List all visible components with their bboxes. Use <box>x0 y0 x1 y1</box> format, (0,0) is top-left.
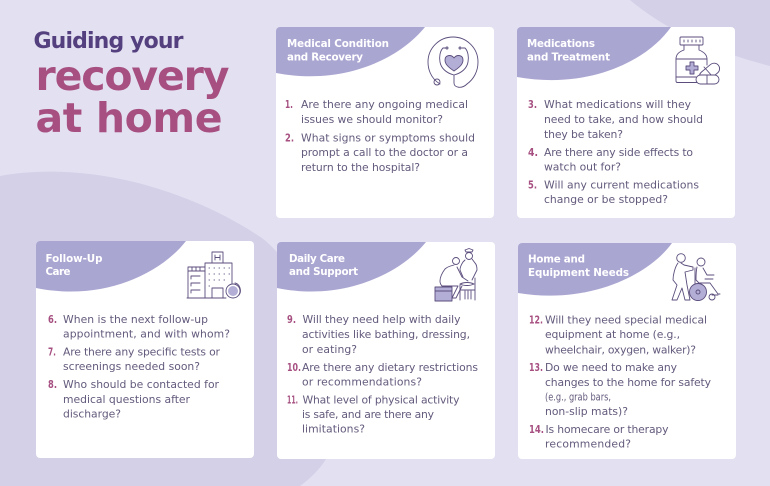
question list: return to the hospital? <box>301 161 420 174</box>
question list: 2. <box>285 132 294 144</box>
question list: What signs or symptoms should <box>301 132 475 144</box>
title <box>34 29 230 142</box>
title: at home <box>36 94 222 142</box>
question list <box>287 313 478 436</box>
panel: daily care and support: Daily Care <box>289 253 345 265</box>
question list: limitations? <box>302 422 365 436</box>
question list: 13. <box>529 361 543 374</box>
question list: 1. <box>285 98 293 111</box>
question list: Will they need help with daily <box>302 313 461 326</box>
question list <box>48 313 230 420</box>
question list: 14. <box>529 423 544 436</box>
question list: 12. <box>529 314 543 326</box>
question list: 11. <box>287 394 298 406</box>
question list: Will they need special medical <box>545 314 707 326</box>
question list: 7. <box>48 346 56 358</box>
question list: 4. <box>528 146 538 159</box>
question list: Are there any ongoing medical <box>301 98 468 111</box>
question list: medical questions after <box>63 393 191 406</box>
question list: Who should be contacted for <box>63 378 220 391</box>
question list: watch out for? <box>544 160 621 174</box>
panel: home and equipment needs: Home and <box>528 254 585 266</box>
question list: 8. <box>48 378 57 391</box>
question list: recommended? <box>545 438 631 450</box>
question list: Are there any dietary restrictions <box>302 361 478 374</box>
panel: medical condition and recovery: and Recovery <box>287 52 363 64</box>
question list: activities like bathing, dressing, <box>302 328 470 341</box>
question list: Are there any specific tests or <box>63 346 221 358</box>
question list: or recommendations? <box>302 376 422 388</box>
question list: equipment at home (e.g., <box>545 328 680 341</box>
question list: need to take, and how should <box>544 113 703 126</box>
icon: caregiver helping patient <box>435 248 477 301</box>
question list: 9. <box>287 313 296 326</box>
question list: change or be stopped? <box>544 193 668 206</box>
panel: daily care and support <box>277 242 495 459</box>
question list <box>285 98 475 174</box>
question list: is safe, and are there any <box>302 408 435 421</box>
title: Guiding your <box>34 29 184 54</box>
panel: medical condition and recovery <box>276 27 494 218</box>
panel: home and equipment needs: Equipment Needs <box>528 267 629 279</box>
icon: caregiver pushing wheelchair <box>672 254 720 300</box>
panel: medications and treatment <box>517 27 735 218</box>
question list <box>529 314 712 450</box>
question list: Is homecare or therapy <box>546 423 669 436</box>
panel: follow-up care: Follow-Up <box>46 253 102 265</box>
question list: 5. <box>528 178 537 192</box>
icon: medicine bottle and pills <box>676 37 722 84</box>
panel: follow-up care <box>36 241 254 458</box>
question list: 6. <box>48 313 57 326</box>
title: recovery <box>36 52 230 100</box>
question list: issues we should monitor? <box>301 113 443 126</box>
question list: wheelchair, oxygen, walker)? <box>545 344 696 356</box>
question list: non-slip mats)? <box>545 405 628 418</box>
icon: hospital building with clock <box>187 252 240 298</box>
panel: daily care and support: and Support <box>289 266 358 278</box>
question list: or eating? <box>302 343 357 356</box>
question list: discharge? <box>63 408 121 420</box>
question list: Do we need to make any <box>545 361 678 374</box>
panel: medical condition and recovery: Medical Condition <box>287 38 389 50</box>
panel: follow-up care: Care <box>46 266 71 278</box>
question list: appointment, and with whom? <box>63 328 230 340</box>
question list <box>528 98 703 206</box>
panel: medications and treatment: Medications <box>527 38 595 50</box>
question list: they be taken? <box>544 128 623 141</box>
panel: home and equipment needs <box>518 243 736 459</box>
question list: What level of physical activity <box>302 394 460 406</box>
panel: medications and treatment: and Treatment <box>527 52 610 64</box>
icon: stethoscope with heart <box>428 37 478 87</box>
question list: When is the next follow-up <box>63 313 208 326</box>
question list: 10. <box>287 361 301 374</box>
question list: prompt a call to the doctor or a <box>301 146 468 159</box>
question list: changes to the home for safety <box>545 376 712 389</box>
question list: Are there any side effects to <box>544 146 693 159</box>
question list: screenings needed soon? <box>63 360 200 373</box>
question list: 3. <box>528 98 537 111</box>
question list: (e.g., grab bars, <box>545 390 611 404</box>
question list: Will any current medications <box>544 178 699 192</box>
question list: What medications will they <box>544 98 692 111</box>
